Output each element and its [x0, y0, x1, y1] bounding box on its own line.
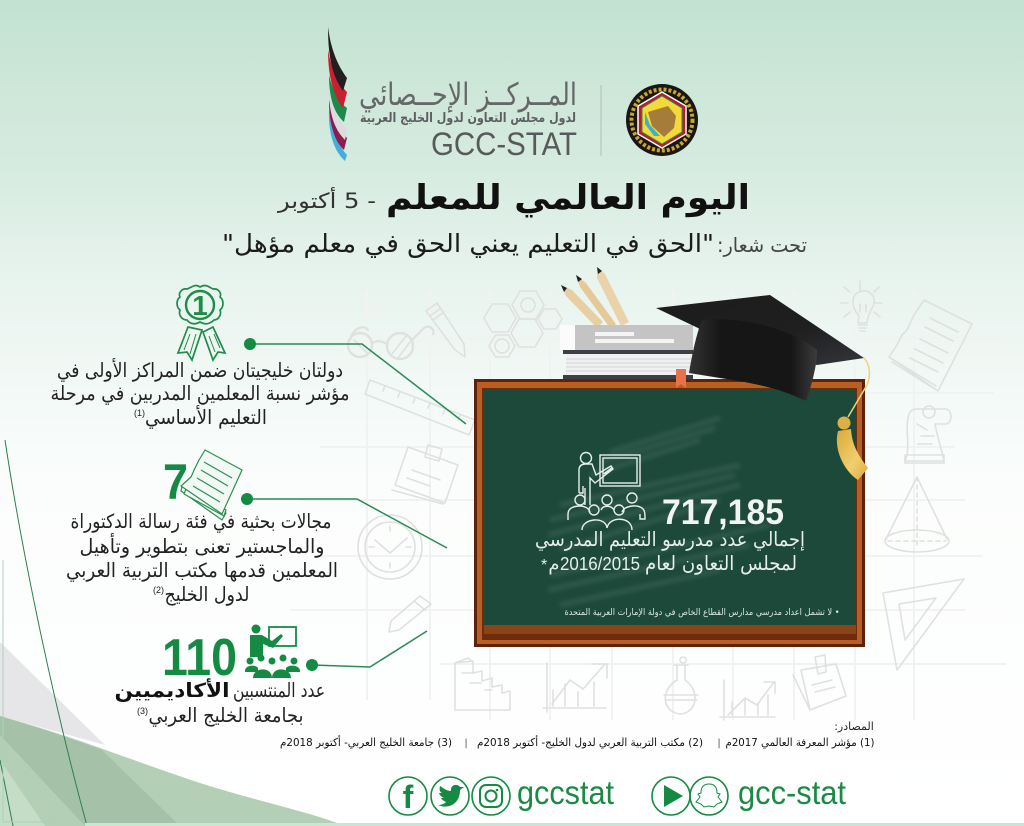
icon: growth chart	[543, 663, 607, 712]
text: two gulf countries: مؤشر نسبة المعلمين المدربين في مرحلة	[50, 382, 350, 405]
icon: sticky note	[392, 445, 458, 504]
icon: pencils	[561, 267, 629, 328]
handle: gcc-stat: gcc-stat	[738, 774, 846, 811]
icon: hexagons	[484, 291, 562, 357]
text: academic trainees: الأكاديميين	[114, 677, 230, 702]
sources: المصادر:	[834, 720, 874, 733]
text: academic trainees: عدد المنتسبين	[233, 679, 325, 702]
icon: pencil	[389, 596, 431, 632]
text: teacher total description: لمجلس التعاون لعام	[645, 552, 797, 575]
icon: clock	[358, 515, 422, 579]
title: - 5 أكتوبر	[277, 187, 376, 213]
icon: green notepad	[181, 450, 242, 520]
icon: stacked books	[560, 325, 693, 379]
icon: first place medal	[177, 285, 225, 360]
text: two gulf countries	[50, 358, 350, 429]
icon: twitter	[431, 777, 469, 815]
handle: gccstat: gccstat	[517, 774, 614, 811]
subtitle: "الحق في التعليم يعني الحق في معلم مؤهل"	[222, 229, 714, 259]
text: seven research areas: والماجستير تعنى بتطوير وتأهيل	[80, 533, 324, 558]
text: seven research areas: مجالات بحثية في فئة رسالة الدكتوراة	[70, 510, 332, 533]
text: two gulf countries: دولتان خليجيتان ضمن المراكز الأولى في	[57, 358, 343, 382]
sources: |	[717, 738, 721, 749]
icon: set square	[883, 579, 964, 670]
icon: GCC emblem	[626, 84, 698, 156]
icon: glasses and pencil	[348, 303, 465, 359]
logo latin name: GCC-STAT	[431, 126, 577, 162]
icon: notepad	[889, 300, 972, 391]
panel: chalkboard	[474, 379, 865, 647]
icon: ruler	[365, 380, 475, 435]
text: seven research areas: (2)	[153, 585, 164, 595]
text: seven research areas	[66, 510, 338, 606]
text: teacher total description	[535, 528, 805, 575]
icon: number steps	[455, 658, 510, 710]
stat: total teachers: 717,185	[662, 493, 784, 532]
chalk smudges	[548, 418, 770, 605]
text: seven research areas: المعلمين قدمها مكتب التربية العربي	[66, 559, 338, 582]
title: اليوم العالمي للمعلم	[386, 178, 750, 218]
text: two gulf countries: التعليم الأساسي	[145, 405, 267, 429]
sources: |	[464, 738, 468, 749]
logo arabic subtitle: لدول مجلس التعاون لدول الخليج العربية	[360, 111, 576, 126]
text: two gulf countries: (1)	[134, 408, 145, 418]
stat: 110: 110	[162, 629, 237, 687]
icon: green teacher with students	[245, 624, 300, 678]
logo ribbon	[328, 27, 347, 161]
connector lines	[241, 338, 466, 671]
text: teacher total description: 2016/2015	[560, 554, 640, 574]
icon: bookmark	[676, 369, 686, 388]
bottom-left decorative shapes	[0, 440, 1024, 826]
sources	[280, 720, 874, 749]
stat: 7: 7	[163, 454, 188, 510]
text: academic trainees: (3)	[137, 706, 148, 716]
logo arabic name: المــركــز الإحــصائي	[359, 77, 577, 113]
icon: cone	[885, 477, 949, 552]
text: teacher total description: م	[548, 554, 560, 575]
icon: light bulb	[841, 281, 882, 331]
text: academic trainees	[114, 677, 325, 727]
social media row	[389, 774, 846, 815]
icon: sticky note small	[793, 655, 846, 710]
logo: GCC-STAT	[328, 27, 577, 162]
icon: graduation cap	[656, 295, 869, 480]
icon: diploma scroll	[905, 409, 951, 463]
sources: (2) مكتب التربية العربي لدول الخليج- أكتوبر 2018م	[477, 735, 703, 749]
icon: facebook: f	[403, 779, 414, 815]
text: teacher total description: *	[541, 557, 547, 574]
sources: (1) مؤشر المعرفة العالمي 2017م	[726, 736, 874, 749]
icon: facebook	[389, 777, 427, 815]
icon: snapchat	[690, 777, 728, 815]
icon: first place medal: 1	[192, 290, 208, 321]
footnote on board: • لا تشمل اعداد مدرسي مدارس القطاع الخاص في دولة الإمارات العربية المتحدة	[564, 608, 840, 618]
sources: (3) جامعة الخليج العربي- أكتوبر 2018م	[280, 735, 452, 749]
text: academic trainees: بجامعة الخليج العربي	[148, 704, 304, 727]
text: seven research areas: لدول الخليج	[164, 583, 250, 606]
icon: growth chart small	[720, 680, 775, 720]
icon: chalk teacher with students	[568, 452, 645, 530]
icon: instagram	[472, 777, 510, 815]
text: teacher total description: إجمالي عدد مدرسو التعليم المدرسي	[535, 528, 805, 552]
icon: flask	[664, 665, 698, 714]
subtitle: تحت شعار:	[717, 233, 807, 257]
icon: youtube play	[652, 777, 690, 815]
background icons	[348, 281, 972, 720]
